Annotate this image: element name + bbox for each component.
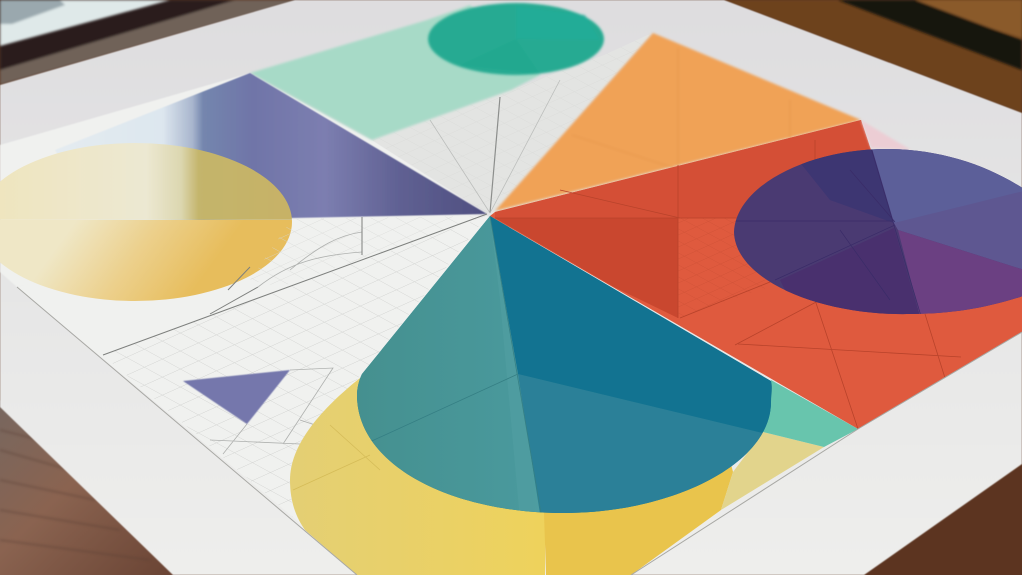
dark object at top right: [838, 0, 1022, 70]
sheet edge lines: [17, 287, 1022, 575]
grid construction lines: [210, 232, 362, 480]
panel: teal teardrop: [350, 210, 780, 520]
panel: purple triangle: [55, 73, 487, 222]
panel: red square: [490, 120, 1022, 429]
panel: mint shape: [250, 5, 540, 140]
wood lower left: [0, 400, 180, 575]
purple circle: [730, 140, 1022, 320]
mint corner: [763, 380, 858, 447]
upper grid beside yellow circle: [250, 216, 487, 287]
wood grain: [0, 430, 150, 560]
yellow circle: [0, 140, 300, 305]
print sheet: [0, 73, 487, 287]
small purple triangle: [183, 370, 290, 424]
lower yellow circle: [290, 378, 824, 575]
device body: [0, 0, 170, 46]
green circle: [428, 3, 604, 75]
dark construction lines: [103, 214, 487, 355]
grid paper lower left: [17, 216, 771, 575]
lower left grid: [103, 216, 487, 517]
wood upper right: [724, 0, 1022, 113]
device shadow at top left: [0, 0, 300, 85]
grid paper wedge top: [372, 33, 652, 213]
panel: orange triangle: [495, 33, 861, 211]
